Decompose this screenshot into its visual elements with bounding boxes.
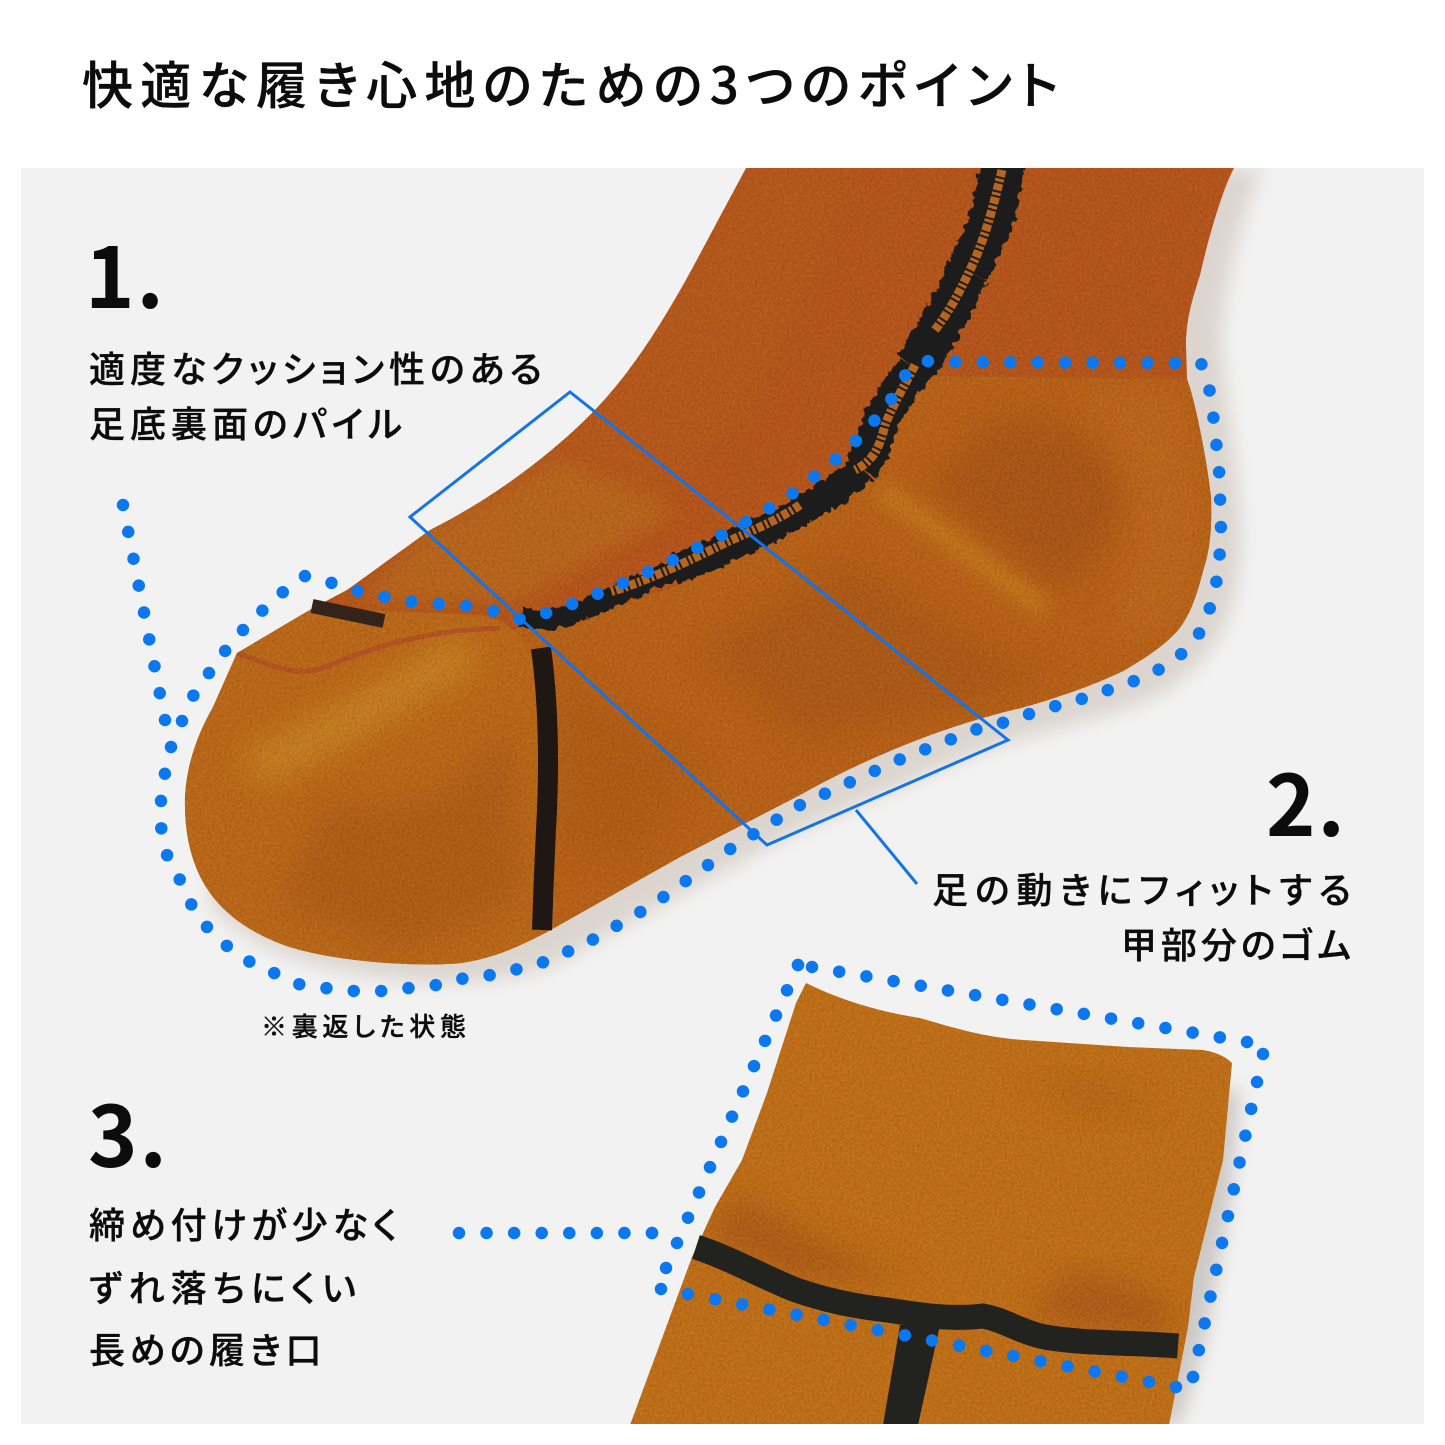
- dotted outline: foot: [161, 361, 1221, 991]
- toe cross stripe: [312, 606, 384, 621]
- number 1: 1.: [85, 212, 166, 333]
- cuff black band: [696, 1247, 1178, 1346]
- cuff shading: [710, 1195, 920, 1280]
- upper fabric: [150, 168, 1260, 985]
- dotted outline: cuff: [655, 959, 1269, 1387]
- dotted leader: point 3: [459, 1227, 658, 1239]
- heel ridge highlight: [880, 490, 1045, 610]
- cuff sock: [630, 983, 1232, 1425]
- blue selection frame: [410, 392, 1008, 884]
- cuff vertical stripe: [883, 1325, 940, 1425]
- text: point 2: 甲部分のゴム: [1121, 917, 1355, 969]
- note: ※裏返した状態: [261, 1007, 471, 1044]
- toe cap: [184, 609, 535, 964]
- title: 快適な履き心地のための3つのポイント: [82, 45, 1066, 119]
- text: point 3: [89, 1197, 403, 1374]
- dotted leader: point 1: [123, 505, 171, 726]
- text: point 2: 足の動きにフィットする: [932, 862, 1358, 914]
- number 2: 2.: [1266, 740, 1347, 861]
- text: point 1: 足底裏面のパイル: [89, 396, 407, 448]
- stripe inner orange loops: [610, 170, 1002, 592]
- toe vertical stripe: [541, 648, 548, 930]
- illustration layer: [116, 168, 1270, 1424]
- text: point 3: 長めの履き口: [89, 1322, 326, 1374]
- toe ridge highlight: [250, 650, 470, 770]
- heel shading: [925, 418, 1130, 590]
- number 3: 3.: [88, 1071, 169, 1192]
- main sock: [150, 160, 1260, 985]
- terry heel and sole: [490, 376, 1212, 956]
- text: point 1: [89, 341, 547, 448]
- text: point 3: ずれ落ちにくい: [89, 1260, 362, 1312]
- text: point 1: 適度なクッション性のある: [89, 341, 547, 393]
- text: point 2: [932, 862, 1358, 969]
- black side stripe: [520, 160, 1004, 620]
- cuff shadow: [1169, 1084, 1247, 1424]
- text: point 3: 締め付けが少なく: [89, 1197, 403, 1249]
- sock shadow: [210, 168, 1262, 983]
